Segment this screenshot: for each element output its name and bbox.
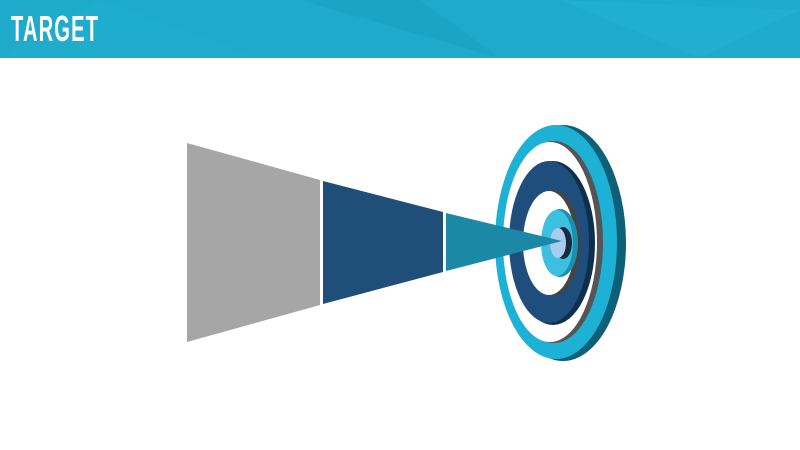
funnel segment: gray [187,143,320,342]
funnel segment: teal [446,213,562,271]
header bar [0,0,800,58]
target [495,125,626,361]
funnel segment: dark blue [323,181,443,304]
title: TARGET [11,8,99,49]
